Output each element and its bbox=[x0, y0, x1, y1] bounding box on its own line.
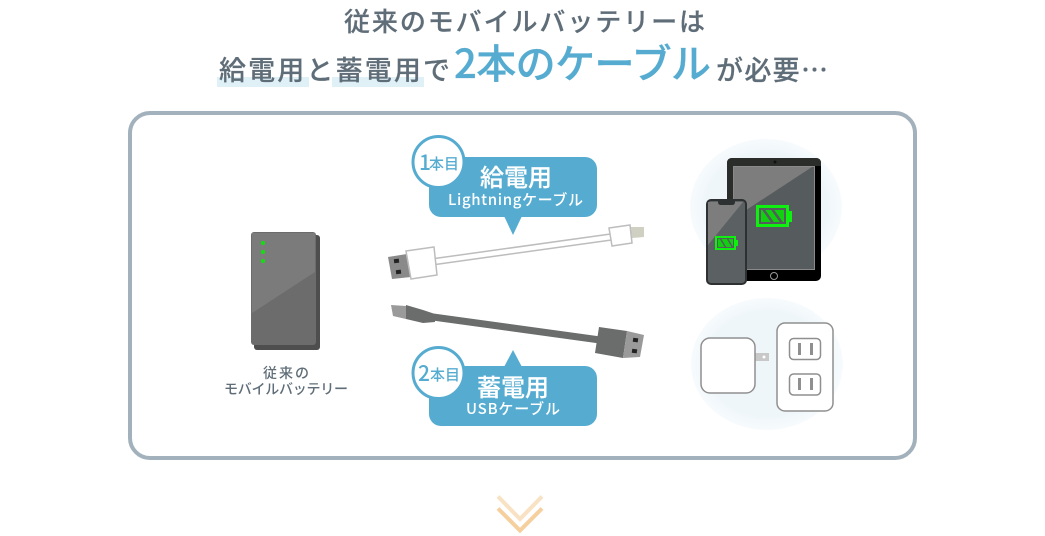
badge: 2本目: 2 bbox=[418, 358, 430, 388]
panel: cable comparison bbox=[130, 113, 915, 458]
callout subheading: USBケーブル bbox=[466, 398, 560, 419]
badge: 1本目: 1 bbox=[419, 147, 431, 177]
charger body bbox=[701, 338, 755, 393]
arrow: double chevron down bbox=[498, 496, 542, 530]
badge: 2本目 bbox=[413, 348, 464, 398]
charger plug bbox=[755, 353, 769, 361]
callout: 給電用 Lightning cable bbox=[413, 136, 597, 235]
icon: tablet and phone charging bbox=[690, 139, 842, 284]
battery label: 従来の bbox=[263, 363, 309, 383]
icon: mobile battery bbox=[251, 232, 320, 350]
battery label bbox=[224, 363, 348, 399]
highlight: 給電用 bbox=[217, 77, 309, 87]
callout heading: 蓄電用 bbox=[477, 368, 549, 403]
title line 1: 従来のモバイルバッテリーは bbox=[344, 2, 705, 39]
callout: 蓄電用 USB cable bbox=[413, 348, 597, 426]
title line 2 lead: 給電用と蓄電用で bbox=[219, 49, 450, 88]
title bbox=[217, 2, 828, 90]
highlight: 蓄電用 bbox=[332, 77, 424, 87]
tablet battery icon bbox=[758, 206, 792, 226]
phone bbox=[707, 200, 746, 284]
phone battery icon bbox=[716, 237, 738, 249]
white lightning cable bbox=[388, 225, 644, 279]
callout subheading: Lightningケーブル bbox=[448, 189, 583, 210]
title line 2 tail: が必要… bbox=[716, 49, 828, 88]
badge: 2本目: 本目 bbox=[430, 364, 460, 385]
icon: charger and wall outlet bbox=[691, 298, 843, 430]
badge: 1本目 bbox=[413, 136, 464, 188]
callout heading: 給電用 bbox=[480, 158, 552, 193]
tablet bbox=[727, 158, 821, 281]
title emphasis: 2本のケーブル bbox=[454, 32, 711, 90]
wall outlet bbox=[777, 323, 833, 411]
grey USB cable bbox=[391, 305, 644, 358]
battery label: モバイルバッテリー bbox=[224, 379, 348, 399]
badge: 1本目: 本目 bbox=[429, 153, 459, 174]
